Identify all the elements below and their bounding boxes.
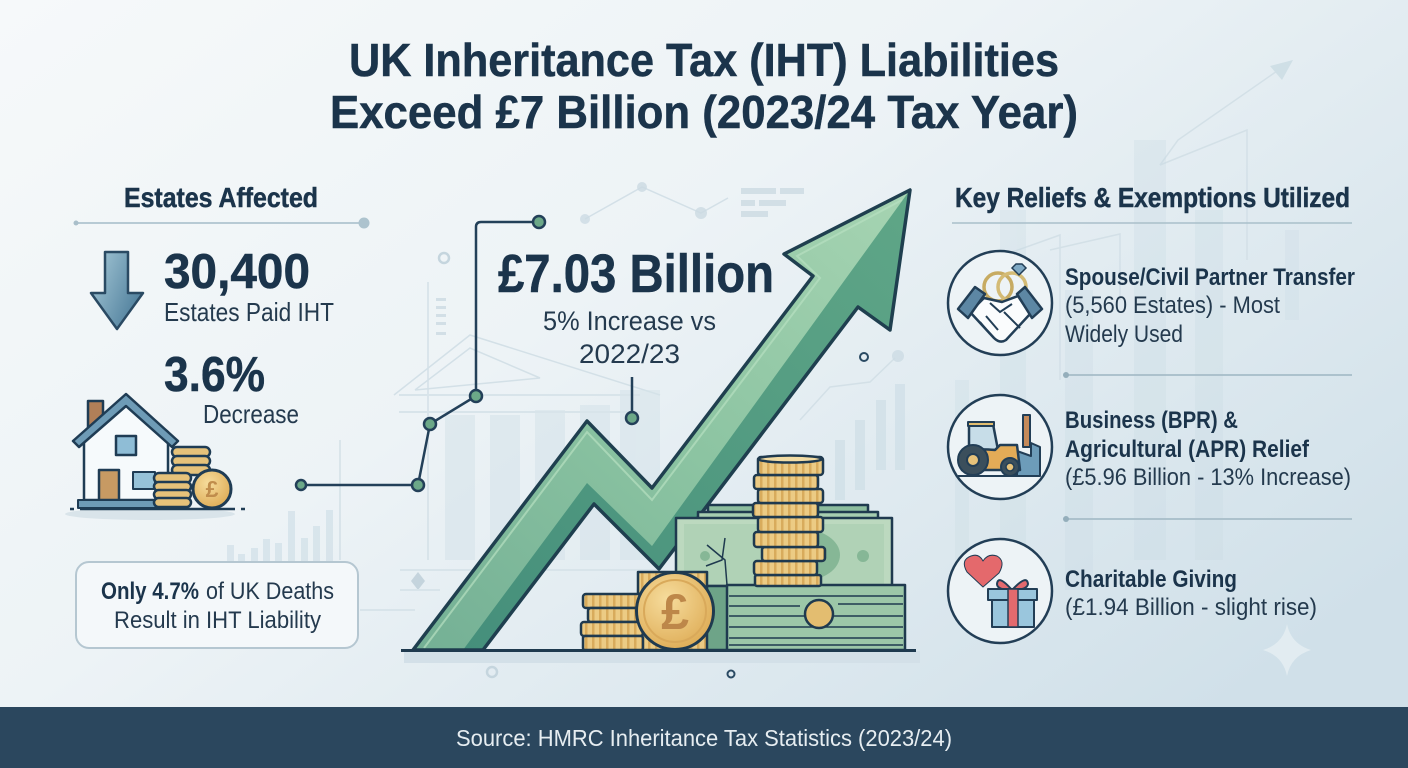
main stat: 7.03 billion: 5% Increase vs [543, 306, 716, 336]
text: charitable giving: Charitable Giving [1065, 566, 1237, 593]
tall coin stack [753, 456, 825, 586]
callout: share of deaths: Only 4.7% [101, 578, 199, 605]
icon: banknotes and coin stacks [581, 456, 905, 650]
icon: handshake and rings [948, 251, 1052, 355]
panel: estates affected [65, 182, 370, 648]
icon: tractor and factory [948, 395, 1052, 499]
panel: key reliefs and exemptions [948, 182, 1355, 643]
callout: share of deaths: of UK Deaths [206, 578, 334, 605]
footer: source [0, 707, 1408, 768]
banknotes [676, 505, 905, 650]
heading rule [952, 222, 1352, 224]
text: charitable giving [1065, 566, 1317, 621]
title [330, 34, 1078, 138]
divider [1063, 516, 1352, 522]
stat: 3.6%: 3.6% [164, 348, 265, 402]
heading: estates affected: Estates Affected [124, 182, 318, 213]
callout: share of deaths: Result in IHT Liability [114, 607, 321, 634]
text: business and agricultural relief [1065, 407, 1351, 491]
icon: house with coins: £ [206, 476, 219, 502]
icon: down arrow [91, 252, 143, 329]
icon: heart and gift [948, 539, 1052, 643]
stat: 30,400: 30,400 [164, 245, 310, 299]
text: business and agricultural relief: Agricultural (APR) Relief [1065, 436, 1310, 463]
main stat: 7.03 billion [498, 244, 774, 369]
pound coin: £ [661, 584, 689, 640]
stat pointer [626, 377, 638, 424]
icon: house with coins [65, 394, 245, 520]
heading: key reliefs: Key Reliefs & Exemptions Utilized [955, 182, 1350, 213]
connector line with nodes [296, 216, 545, 491]
short coin stack [581, 572, 707, 650]
divider [1063, 372, 1352, 378]
text: spouse transfer: (5,560 Estates) - Most [1065, 292, 1280, 319]
text: charitable giving: (£1.94 Billion - slight rise) [1065, 594, 1317, 621]
heading rule [74, 218, 370, 228]
text: business and agricultural relief: (£5.96 Billion - 13% Increase) [1065, 464, 1351, 491]
text: spouse transfer: Widely Used [1065, 321, 1183, 348]
main stat: 7.03 billion: 2022/23 [579, 339, 680, 369]
text: spouse transfer: Spouse/Civil Partner Transfer [1065, 264, 1355, 291]
callout: share of deaths [76, 562, 358, 648]
stat label: Estates Paid IHT [164, 297, 334, 327]
title: Exceed £7 Billion (2023/24 Tax Year) [330, 86, 1078, 138]
chart: rising green arrow [413, 190, 910, 650]
ground line [401, 650, 920, 663]
title: UK Inheritance Tax (IHT) Liabilities [349, 34, 1059, 86]
pound coin [636, 572, 714, 650]
stat label: Decrease [203, 399, 299, 429]
footer: source: Source: HMRC Inheritance Tax Statistics (2023/24) [456, 725, 952, 751]
text: business and agricultural relief: Business (BPR) & [1065, 407, 1238, 434]
text: spouse transfer [1065, 264, 1355, 348]
main stat: 7.03 billion: £7.03 Billion [498, 244, 774, 304]
